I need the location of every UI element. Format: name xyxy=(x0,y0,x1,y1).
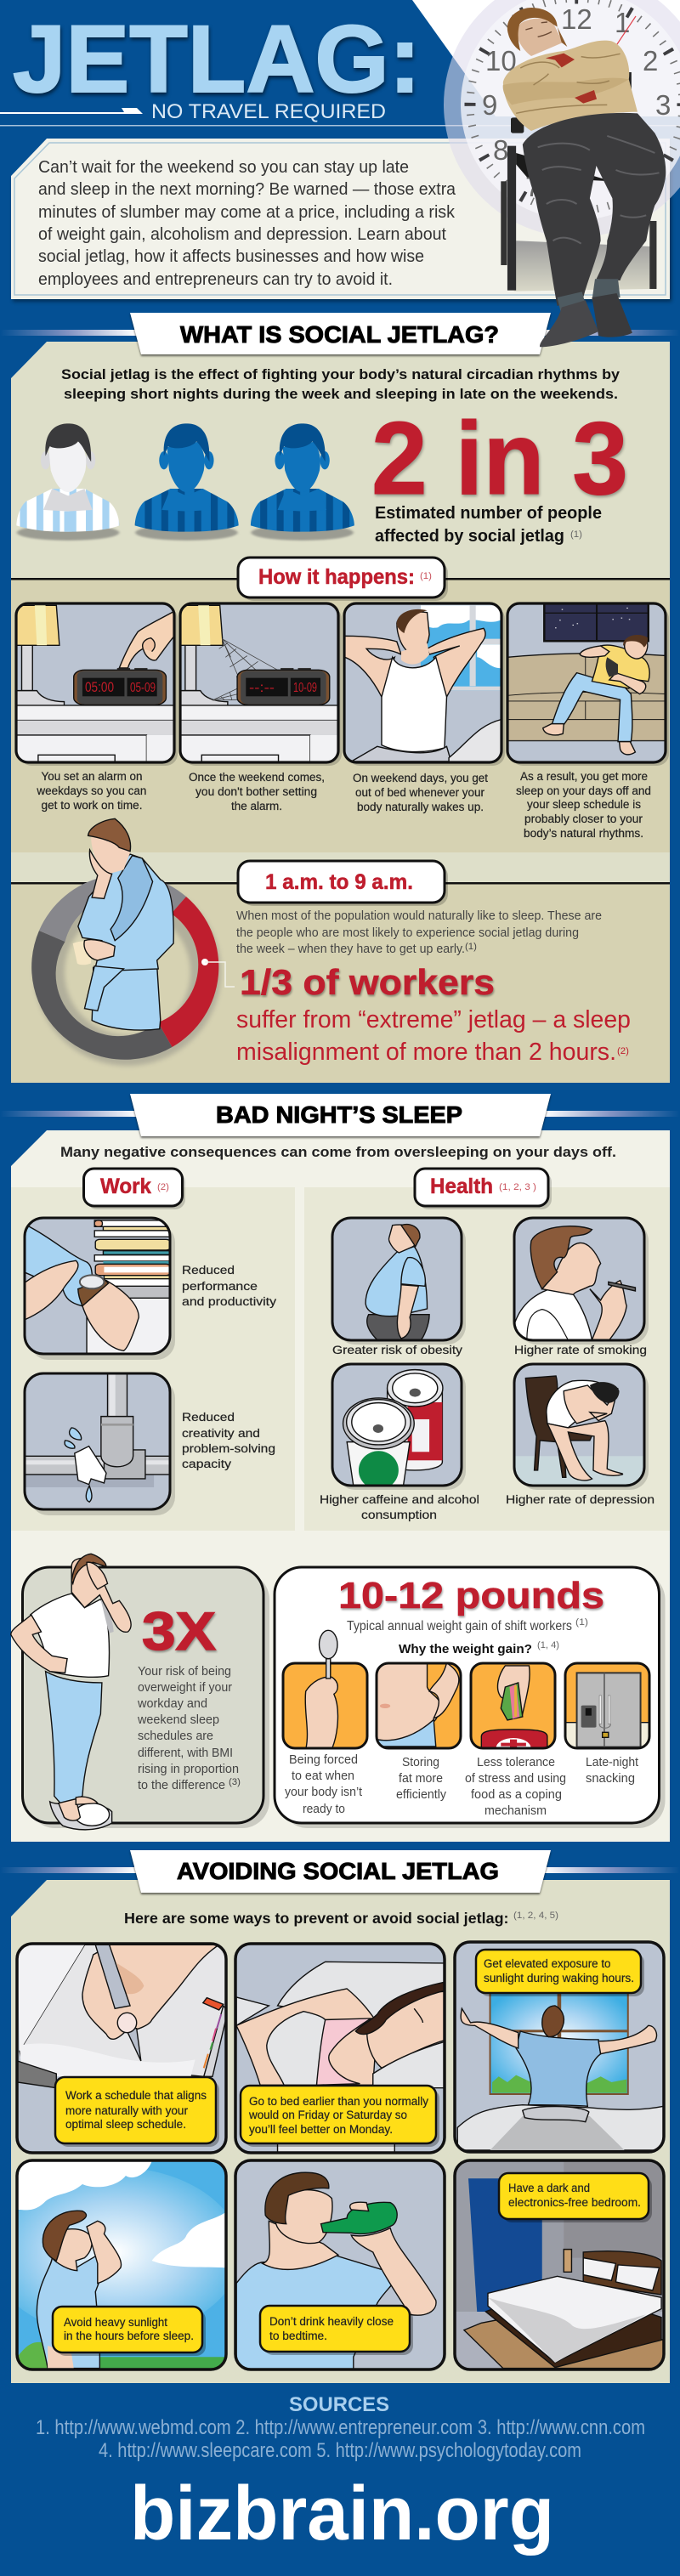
clock: 9 xyxy=(482,89,497,121)
panel: avoiding social jetlag: Here are some ways to prevent or avoid social jetlag: xyxy=(124,1910,508,1927)
section banner: avoiding social jetlag (heading): AVOIDING SOCIAL JETLAG xyxy=(177,1858,499,1884)
callout: optimal sleep schedule. xyxy=(65,2118,186,2131)
face xyxy=(91,837,130,874)
donut chart: one third of workers xyxy=(31,875,235,1060)
trousers xyxy=(523,113,666,306)
clock: 10 xyxy=(485,45,517,76)
stat: 2 in 3: 2 in 3 xyxy=(371,400,628,516)
pill: health: (1, 2, 3 ) xyxy=(499,1182,536,1192)
comic: go to bed earlier xyxy=(235,1944,447,2153)
stat: one third of workers: 1/3 of workers xyxy=(240,962,495,1002)
captions: how it happens: out of bed whenever your xyxy=(355,786,484,799)
captions: weight gain reasons: efficiently xyxy=(396,1787,446,1802)
belt xyxy=(84,966,123,1011)
captions: how it happens: the alarm. xyxy=(231,800,282,812)
intro text: Can’t wait for the weekend so you can stay up late xyxy=(38,157,409,177)
callout xyxy=(260,2306,413,2355)
pill: how it happens xyxy=(238,558,448,601)
definition text: sleeping short nights during the week and sleeping in late on the weekends. xyxy=(64,386,618,402)
text: overweight risk: overweight if your xyxy=(138,1680,232,1695)
panel: intro xyxy=(11,139,670,299)
captions: weight gain reasons: food as a coping xyxy=(471,1787,562,1802)
robe body xyxy=(78,854,173,971)
definition text: Social jetlag is the effect of fighting your body’s natural circadian rhythms by xyxy=(61,366,620,382)
text: overweight risk: (3) xyxy=(229,1777,241,1787)
sleep time text: When most of the population would naturally like to sleep. These are xyxy=(236,909,602,923)
section banner: what is social jetlag (heading): WHAT IS SOCIAL JETLAG? xyxy=(180,321,499,348)
section banner strips: avoiding social jetlag xyxy=(0,1867,680,1873)
panel: weight gain: (1) xyxy=(575,1617,588,1628)
captions: weight gain reasons: to eat when xyxy=(292,1769,354,1783)
person white xyxy=(16,423,119,532)
pill: work: Work xyxy=(100,1175,151,1198)
lapel xyxy=(110,856,153,941)
callout: in the hours before sleep. xyxy=(64,2330,194,2342)
text: reduced creativity xyxy=(182,1411,275,1470)
comic: work schedule xyxy=(17,1942,228,2153)
callout: sunlight during waking hours. xyxy=(484,1972,634,1984)
captions: health: Higher rate of smoking xyxy=(514,1343,647,1356)
captions: how it happens: You set an alarm on xyxy=(41,770,143,783)
section banner: avoiding social jetlag (heading) xyxy=(130,1850,551,1893)
captions: how it happens: probably closer to your xyxy=(524,812,643,825)
icons: three people xyxy=(16,423,354,541)
text: reduced creativity: creativity and xyxy=(182,1427,260,1440)
captions: weight gain reasons: Storing xyxy=(402,1755,439,1769)
section banner strips: bad night's sleep xyxy=(0,1111,680,1117)
captions: weight gain reasons: your body isn’t xyxy=(285,1785,363,1799)
captions: weight gain reasons xyxy=(285,1752,639,1818)
text: reduced performance: and productivity xyxy=(182,1295,276,1308)
pill: health: Health xyxy=(430,1175,493,1198)
pill: how it happens: (1) xyxy=(420,571,432,581)
text: reduced creativity: problem-solving xyxy=(182,1442,275,1455)
clock: 3 xyxy=(655,89,671,121)
captions: health: Greater risk of obesity xyxy=(332,1343,462,1356)
panel: weight gain: (1, 4) xyxy=(537,1640,559,1650)
icon: stress eating xyxy=(471,1663,555,1758)
section banner: what is social jetlag xyxy=(0,330,680,336)
comic: no alarm on the weekend: --:-- xyxy=(249,681,275,695)
captions: how it happens: your sleep schedule is xyxy=(527,798,641,811)
text: reduced performance: Reduced xyxy=(182,1264,235,1277)
clock: 1 xyxy=(615,7,630,38)
captions: how it happens: sleep on your days off and xyxy=(516,784,651,797)
sleep time text xyxy=(236,909,602,956)
pill: 1 a.m. to 9 a.m. xyxy=(238,861,448,906)
comic: smoking xyxy=(514,1218,649,1345)
figure: man asleep in chair xyxy=(501,8,666,347)
captions: how it happens: get to work on time. xyxy=(41,799,143,812)
sources: 4. http://www.sleepcare.com 5. http://www.psychologytoday.com xyxy=(99,2439,581,2462)
definition text xyxy=(61,366,620,402)
text: overweight risk: weekend sleep xyxy=(137,1713,219,1727)
captions: weight gain reasons: Late-night xyxy=(586,1755,639,1769)
comic: waking up naturally xyxy=(344,603,505,766)
callout xyxy=(241,2086,439,2147)
captions: weight gain reasons: snacking xyxy=(586,1771,635,1786)
clock: 12 xyxy=(561,3,592,35)
figure: man in robe xyxy=(73,818,173,1030)
callout: Go to bed earlier than you normally xyxy=(249,2095,428,2108)
shirt xyxy=(503,41,638,131)
panel: weight gain: 10-12 pounds xyxy=(338,1575,604,1616)
comic: set an alarm xyxy=(16,603,178,766)
captions: how it happens: As a result, you get more xyxy=(520,770,648,783)
stat: 2 in 3: (1) xyxy=(570,529,582,540)
text: overweight risk: schedules are xyxy=(138,1729,213,1743)
comic: no alarm on the weekend: 10-09 xyxy=(293,681,317,695)
subtitle with pointer line xyxy=(0,100,386,123)
text: overweight risk: Your risk of being xyxy=(138,1664,231,1679)
comic: reduced creativity xyxy=(24,1373,175,1515)
subtitle with pointer line: NO TRAVEL REQUIRED xyxy=(151,100,386,123)
text: reduced performance: performance xyxy=(182,1280,258,1293)
clock xyxy=(444,0,680,237)
section banner: bad night's sleep (heading): BAD NIGHT’S SLEEP xyxy=(216,1101,462,1128)
intro text: and sleep in the next morning? Be warned — those extra xyxy=(38,179,456,199)
spoon xyxy=(320,1630,337,1679)
captions: how it happens: On weekend days, you get xyxy=(353,772,488,784)
callout xyxy=(55,2077,219,2147)
logo: bizbrain.org: bizbrain.org xyxy=(130,2471,554,2556)
captions: weight gain reasons: Being forced xyxy=(289,1752,358,1767)
hair xyxy=(88,818,131,852)
pill: how it happens: How it happens: xyxy=(258,565,415,589)
comic: set an alarm: 05-09 xyxy=(130,681,156,695)
sources: SOURCES xyxy=(289,2393,389,2416)
section banner: what is social jetlag (heading) xyxy=(130,313,551,354)
text: overweight risk xyxy=(137,1664,241,1792)
pill: work: (2) xyxy=(157,1182,169,1192)
callout: Work a schedule that aligns xyxy=(65,2089,207,2102)
panel: bad night's sleep: Many negative consequences can come from oversleeping on your days off. xyxy=(60,1144,616,1160)
captions: how it happens: weekdays so you can xyxy=(36,784,146,797)
stat: 2 in 3: Estimated number of people xyxy=(375,504,602,523)
callout: Have a dark and xyxy=(508,2182,590,2194)
clock: 7 xyxy=(525,171,541,202)
comic: sunlight exposure xyxy=(455,1942,664,2152)
captions: weight gain reasons: of stress and using xyxy=(465,1771,566,1786)
panel: 3X risk xyxy=(11,1554,269,1830)
panel: avoiding social jetlag xyxy=(0,1880,670,2383)
intro text: of weight gain, alcoholism and depression. Learn about xyxy=(38,224,446,244)
pill: health xyxy=(415,1169,552,1209)
callout: Get elevated exposure to xyxy=(484,1957,610,1970)
captions: how it happens: body’s natural rhythms. xyxy=(524,827,643,840)
arm to cheek xyxy=(89,850,112,898)
comic: no alarm on the weekend xyxy=(180,603,342,766)
callout xyxy=(499,2173,652,2222)
comic: set an alarm: 05:00 xyxy=(85,679,114,695)
panel: weight gain: Why the weight gain? xyxy=(399,1642,532,1656)
sleep time text: the week – when they have to get up early. xyxy=(236,942,465,956)
text: reduced creativity: capacity xyxy=(182,1458,231,1470)
panel: what is social jetlag xyxy=(11,342,670,1083)
text: overweight risk: to the difference xyxy=(138,1778,225,1792)
comic: obesity xyxy=(332,1218,466,1345)
text: overweight risk: workday and xyxy=(137,1696,207,1711)
clock: 8 xyxy=(493,134,508,166)
person blue 1 xyxy=(135,423,239,532)
panel: weight gain: Typical annual weight gain of shift workers xyxy=(347,1619,572,1633)
text: overweight risk: different, with BMI xyxy=(138,1746,233,1760)
lower hand xyxy=(84,940,115,960)
callout xyxy=(53,2307,206,2356)
panel: weight gain xyxy=(275,1567,665,1828)
panel: bad night's sleep xyxy=(11,1130,670,1842)
captions: weight gain reasons: fat more xyxy=(399,1771,443,1786)
text: reduced performance xyxy=(182,1264,276,1308)
figure: man on scale xyxy=(11,1554,131,1830)
stat: one third of workers: (2) xyxy=(617,1046,629,1056)
panel: avoiding social jetlag: (1, 2, 4, 5) xyxy=(513,1911,558,1921)
captions: how it happens: you don't bother setting xyxy=(196,785,317,798)
captions: how it happens: body naturally wakes up. xyxy=(357,801,484,813)
callout: you’ll feel better on Monday. xyxy=(249,2123,393,2136)
comic: reduced performance xyxy=(24,1218,175,1360)
intro text xyxy=(38,157,456,289)
captions: weight gain reasons: Less tolerance xyxy=(477,1755,555,1769)
captions: health: Higher rate of depression xyxy=(506,1492,654,1506)
stat: one third of workers xyxy=(236,962,631,1066)
captions: how it happens: Once the weekend comes, xyxy=(189,771,325,784)
icon: late night snacking xyxy=(565,1663,649,1749)
comic: caffeine and alcohol xyxy=(332,1364,466,1490)
callout xyxy=(476,1950,644,1996)
captions: weight gain reasons: ready to xyxy=(303,1802,345,1816)
icon: forced to eat xyxy=(283,1630,367,1749)
stat: one third of workers: suffer from “extreme” jetlag – a sleep xyxy=(236,1006,631,1033)
pill: 1 a.m. to 9 a.m.: 1 a.m. to 9 a.m. xyxy=(265,870,413,894)
comic: sleeping more on days off xyxy=(507,603,669,766)
callout: electronics-free bedroom. xyxy=(508,2196,641,2209)
captions: how it happens xyxy=(36,770,651,840)
captions: health: Higher caffeine and alcohol xyxy=(320,1492,479,1506)
sleep time text: the people who are most likely to experience social jetlag during xyxy=(236,926,579,940)
captions: health xyxy=(320,1343,654,1521)
stat: 2 in 3: affected by social jetlag xyxy=(375,527,564,546)
title: JETLAG: xyxy=(13,6,421,112)
robe skirt xyxy=(92,966,161,1030)
section banner: bad night's sleep (heading) xyxy=(130,1094,551,1136)
stat: one third of workers: misalignment of more than 2 hours. xyxy=(236,1039,616,1066)
callout: to bedtime. xyxy=(269,2330,327,2342)
person blue 2 xyxy=(251,423,354,532)
captions: health: consumption xyxy=(361,1508,437,1521)
comic: depression xyxy=(514,1364,649,1490)
text: reduced creativity: Reduced xyxy=(182,1411,235,1424)
callout: more naturally with your xyxy=(65,2104,188,2117)
stat: 3X: 3X xyxy=(142,1602,216,1662)
callout: Don’t drink heavily close xyxy=(269,2315,394,2328)
sources xyxy=(36,2393,645,2462)
intro text: employees and entrepreneurs can try to avoid it. xyxy=(38,269,393,289)
intro text: social jetlag, how it affects businesses and how wise xyxy=(38,246,424,266)
clock: 2 xyxy=(643,45,658,76)
callout: would on Friday or Saturday so xyxy=(248,2109,407,2121)
icon: storing fat xyxy=(377,1663,461,1748)
comic: avoid heavy sunlight xyxy=(15,2159,228,2371)
header white wedge xyxy=(412,0,680,116)
head xyxy=(516,19,563,56)
text: overweight risk: rising in proportion xyxy=(138,1762,239,1776)
captions: weight gain reasons: mechanism xyxy=(484,1803,547,1818)
comic: don't drink heavily xyxy=(235,2160,445,2371)
sleep time text: (1) xyxy=(465,942,477,952)
pill: work xyxy=(83,1169,185,1209)
comic: dark bedroom xyxy=(455,2160,665,2371)
intro text: minutes of slumber may come at a price, including a risk xyxy=(38,202,456,222)
callout: Avoid heavy sunlight xyxy=(64,2316,167,2329)
